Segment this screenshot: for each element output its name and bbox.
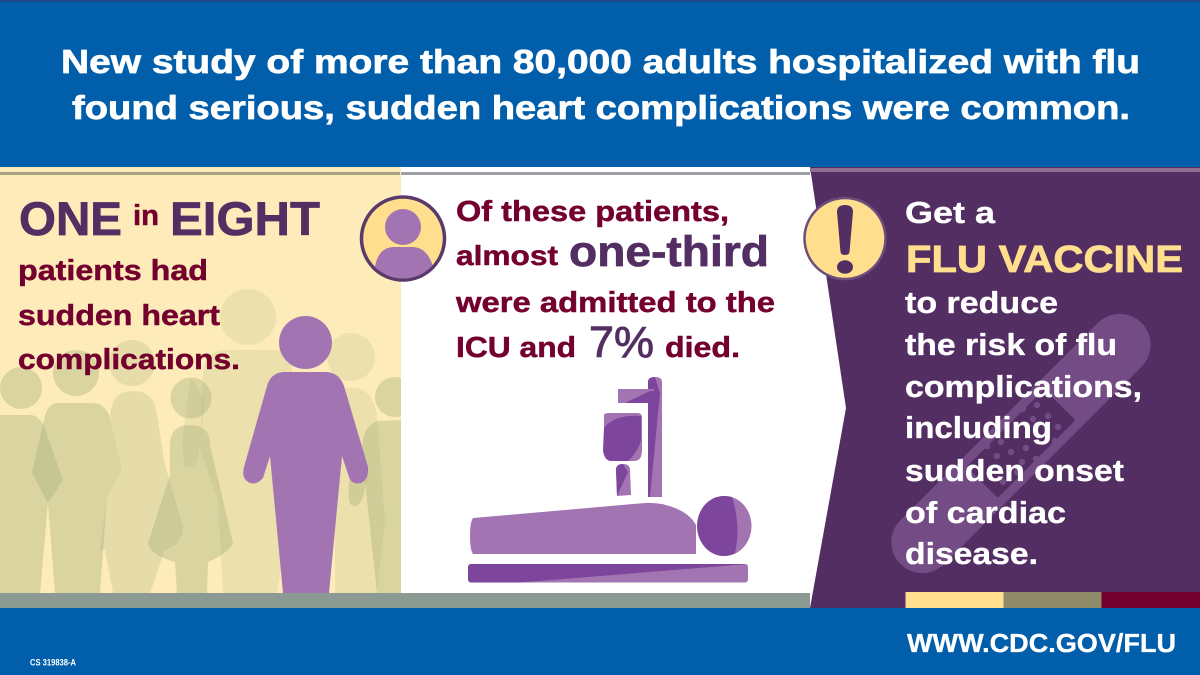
header banner	[0, 0, 1200, 167]
header title: found serious, sudden heart complications were common.	[72, 89, 1130, 126]
icon: patient avatar	[362, 197, 444, 285]
colour swatch bar	[906, 592, 1200, 608]
one in eight heading: in	[133, 200, 159, 232]
ICU text: almost	[456, 240, 558, 271]
icon: hospital bed patient and IV	[468, 377, 752, 582]
ICU text: died.	[665, 332, 740, 364]
call to action text: including	[905, 410, 1052, 445]
header title: New study of more than 80,000 adults hospitalized with flu	[61, 43, 1140, 80]
job code: CS 319838-A	[30, 658, 76, 668]
call to action text: FLU VACCINE	[906, 239, 1183, 281]
ICU text: one-third	[569, 228, 769, 276]
one in eight heading	[19, 192, 320, 245]
ICU text: were admitted to the	[455, 287, 775, 319]
call to action text: complications,	[905, 369, 1142, 404]
icon: exclamation	[804, 198, 886, 279]
ICU text: ICU and	[456, 332, 576, 364]
call to action text: the risk of flu	[905, 327, 1117, 362]
one in eight text: sudden heart	[18, 300, 220, 332]
panel: ICU	[362, 167, 810, 593]
website url: WWW.CDC.GOV/FLU	[907, 628, 1176, 658]
one in eight text	[18, 255, 240, 376]
one in eight heading: ONE	[19, 192, 122, 245]
one in eight text: patients had	[18, 255, 208, 287]
header title	[61, 43, 1140, 126]
panel: get a flu vaccine	[804, 167, 1200, 608]
ICU text: Of these patients,	[456, 196, 729, 228]
ICU text: 7%	[589, 318, 654, 367]
call to action text: sudden onset	[905, 453, 1124, 488]
footer banner	[0, 608, 1200, 675]
one in eight text: complications.	[18, 344, 240, 376]
one in eight heading: EIGHT	[170, 192, 320, 245]
panel: one in eight	[0, 167, 415, 593]
highlighted person figure	[243, 316, 368, 593]
call to action text: to reduce	[905, 285, 1058, 320]
call to action text	[905, 195, 1183, 571]
grey divider strip	[0, 593, 810, 608]
ICU text	[455, 196, 775, 367]
call to action text: of cardiac	[905, 495, 1066, 530]
icon: bandage	[879, 301, 1163, 586]
call to action text: Get a	[905, 195, 996, 230]
crowd silhouettes	[0, 289, 415, 593]
call to action text: disease.	[905, 536, 1038, 571]
